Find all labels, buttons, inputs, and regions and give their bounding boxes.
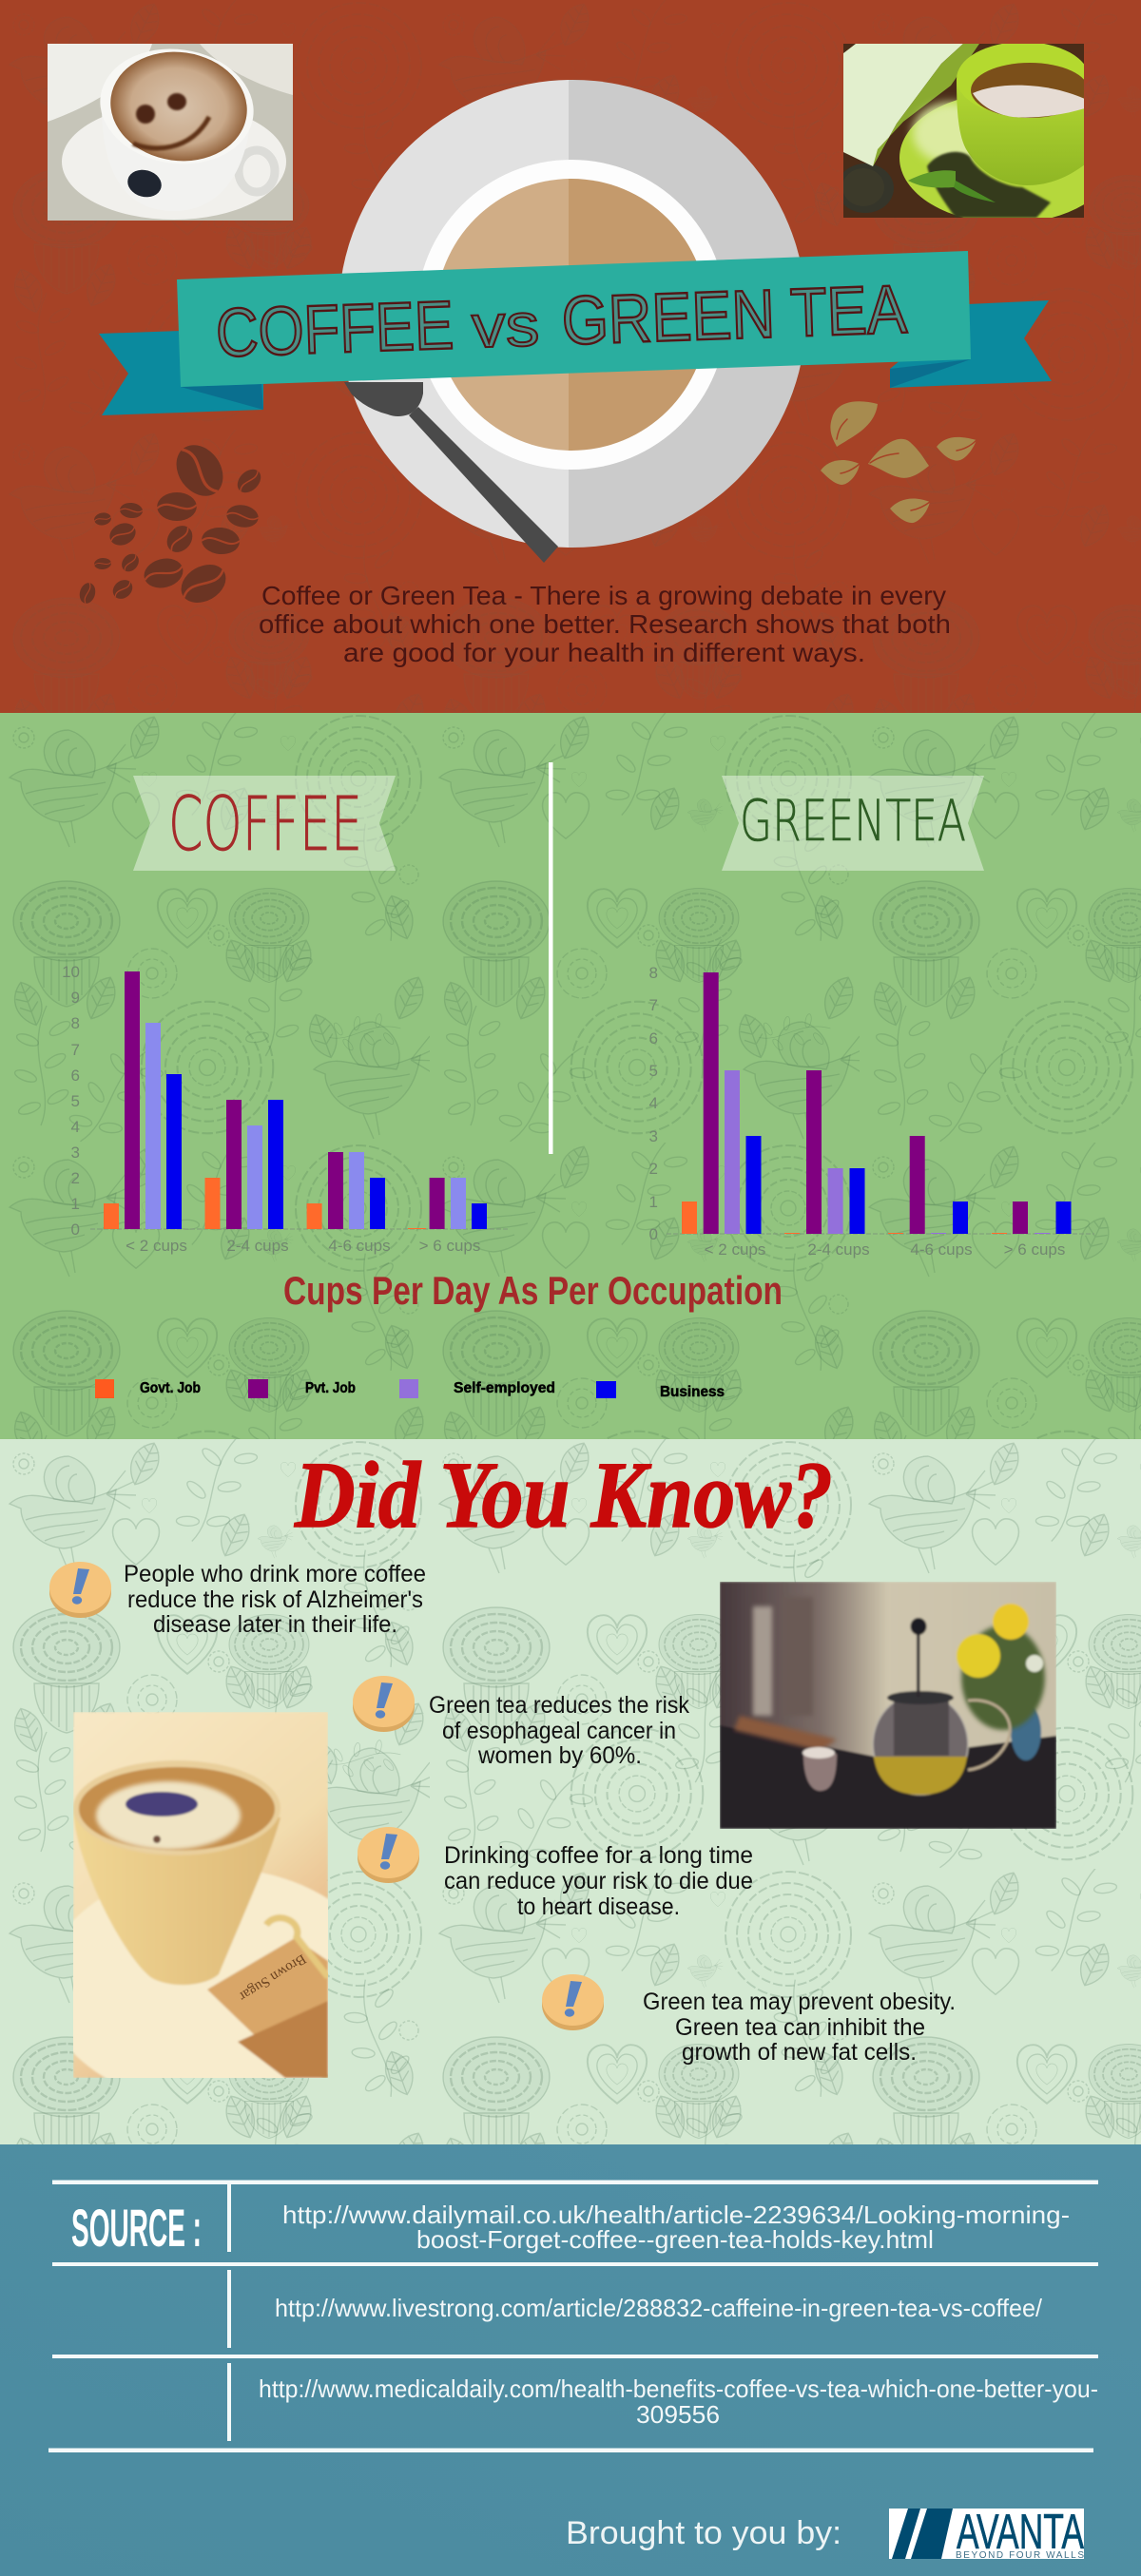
source links: 309556 [636, 2400, 720, 2429]
y axis labels: 10 [62, 963, 80, 981]
credit text: Brought to you by: [566, 2515, 841, 2551]
callout text: People who drink more coffee [124, 1561, 426, 1587]
legend: Self-employed [454, 1380, 555, 1396]
title: vs [471, 290, 540, 361]
icon: exclamation badge [542, 1974, 604, 2030]
y axis labels: 2 [649, 1160, 658, 1178]
source links [259, 2201, 1098, 2429]
y axis labels: 3 [71, 1144, 80, 1162]
ribbon: coffee heading [133, 776, 396, 871]
callout text: reduce the risk of Alzheimer's [127, 1586, 423, 1613]
y axis labels: 7 [71, 1041, 80, 1059]
icon: coffee beans [77, 436, 265, 610]
panel: sources footer [0, 2144, 1141, 2576]
photo: coffee cup with sugar [73, 1712, 328, 2078]
category labels [705, 1240, 1065, 1259]
y axis labels: 9 [71, 989, 80, 1007]
intro text: are good for your health in different ways. [343, 638, 865, 667]
banner: title ribbon [99, 251, 1052, 415]
callout text: to heart disease. [517, 1894, 680, 1920]
illustration: spoon [344, 382, 558, 563]
y axis labels: 2 [71, 1169, 80, 1187]
icon: exclamation badge [358, 1827, 419, 1883]
category labels: < 2 cups [705, 1240, 765, 1259]
callout text: can reduce your risk to die due [444, 1868, 753, 1894]
ribbon: coffee heading: COFFEE [168, 782, 362, 868]
category labels: > 6 cups [1004, 1240, 1065, 1259]
category labels: 2-4 cups [226, 1237, 289, 1255]
source links: http://www.dailymail.co.uk/health/article-2239634/Looking-morning- [282, 2201, 1070, 2229]
logo: Avanta [889, 2505, 1084, 2561]
sources table [48, 2181, 1098, 2452]
photo: smiley cappuccino [48, 39, 293, 221]
y axis labels [649, 964, 658, 1243]
callout text [429, 1692, 689, 1769]
callout text: Green tea reduces the risk [429, 1692, 689, 1719]
icon: exclamation badge [49, 1562, 111, 1618]
y axis labels: 5 [71, 1092, 80, 1110]
legend: Govt. Job [140, 1380, 201, 1396]
callout text: Green tea can inhibit the [675, 2014, 925, 2041]
panel: header [0, 0, 1141, 713]
legend [95, 1379, 725, 1400]
y axis labels: 4 [71, 1118, 80, 1136]
callout text [643, 1989, 956, 2066]
title [215, 272, 908, 372]
illustration: plate and cup [338, 80, 806, 548]
bars [104, 971, 487, 1229]
photo: french press tea [720, 1582, 1056, 1829]
callout text: women by 60%. [477, 1742, 642, 1769]
heading: Did You Know? [294, 1442, 833, 1548]
callout text: Green tea may prevent obesity. [643, 1989, 956, 2015]
category labels: > 6 cups [419, 1237, 480, 1255]
icon: tea leaves [821, 401, 977, 523]
intro text: office about which one better. Research shows that both [259, 609, 951, 639]
y axis labels: 6 [649, 1029, 658, 1048]
panel: did you know [0, 1439, 1141, 2144]
title: COFFEE [215, 287, 454, 372]
source label: SOURCE : [71, 2198, 202, 2258]
legend: Pvt. Job [305, 1380, 356, 1396]
source links: http://www.livestrong.com/article/288832-caffeine-in-green-tea-vs-coffee/ [275, 2294, 1043, 2322]
intro text [259, 581, 951, 667]
y axis labels: 3 [649, 1127, 658, 1145]
y axis labels [62, 963, 80, 1239]
source links: http://www.medicaldaily.com/health-benefits-coffee-vs-tea-which-one-better-you- [259, 2374, 1098, 2403]
chart: green tea cups by occupation [649, 964, 1094, 1259]
y axis labels: 1 [649, 1193, 658, 1211]
title: GREEN TEA [561, 272, 908, 359]
callout text [444, 1842, 753, 1920]
callout: Alzheimer's [49, 1561, 426, 1638]
callout: heart disease [358, 1827, 753, 1920]
callout: esophageal cancer [353, 1676, 689, 1769]
y axis labels: 8 [71, 1014, 80, 1032]
logo: Avanta: AVANTA [957, 2505, 1084, 2560]
intro text: Coffee or Green Tea - There is a growing debate in every [261, 581, 946, 610]
chart title: Cups Per Day As Per Occupation [283, 1268, 783, 1313]
y axis labels: 8 [649, 964, 658, 982]
category labels: < 2 cups [126, 1237, 187, 1255]
callout text: of esophageal cancer in [442, 1718, 676, 1744]
y axis labels: 0 [71, 1221, 80, 1239]
photo: green tea cup [843, 44, 1084, 218]
bars [682, 972, 1071, 1234]
icon: exclamation badge [353, 1676, 415, 1732]
category labels [126, 1237, 480, 1255]
callout text: growth of new fat cells. [682, 2039, 917, 2066]
ribbon: green tea heading [722, 776, 984, 871]
callout: obesity [542, 1974, 956, 2066]
category labels: 2-4 cups [807, 1240, 870, 1259]
photo: coffee cup with sugar: Brown Sugar [236, 1951, 308, 2004]
y axis labels: 0 [649, 1225, 658, 1243]
chart: coffee cups by occupation [62, 963, 509, 1255]
y axis labels: 4 [649, 1094, 658, 1112]
logo: Avanta: BEYOND FOUR WALLS [956, 2550, 1084, 2561]
y axis labels: 6 [71, 1067, 80, 1085]
category labels: 4-6 cups [328, 1237, 391, 1255]
y axis labels: 5 [649, 1062, 658, 1080]
y axis labels: 7 [649, 996, 658, 1014]
callout text: disease later in their life. [153, 1611, 397, 1638]
legend: Business [660, 1384, 725, 1400]
panel: charts [0, 713, 1141, 1439]
callout text: Drinking coffee for a long time [444, 1842, 753, 1869]
source links: boost-Forget-coffee--green-tea-holds-key.html [416, 2225, 934, 2254]
callout text [124, 1561, 426, 1638]
y axis labels: 1 [71, 1195, 80, 1213]
category labels: 4-6 cups [910, 1240, 973, 1259]
ribbon: green tea heading: GREENTEA [740, 788, 966, 855]
